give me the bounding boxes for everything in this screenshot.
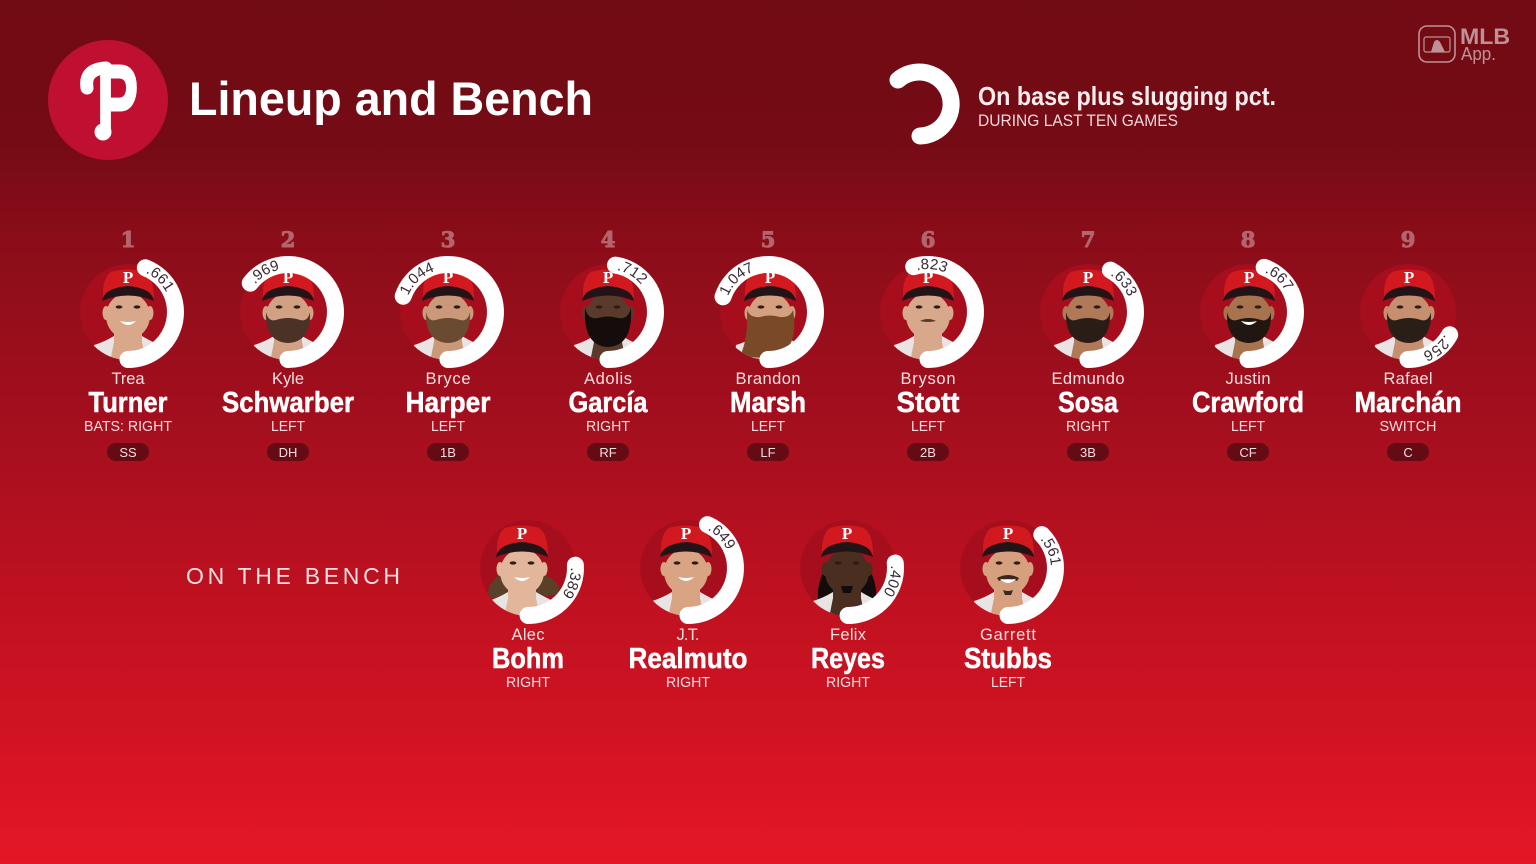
OPS ring 1.044: 1.044 — [400, 262, 434, 295]
player 6: Bryson Stott — [880, 227, 984, 461]
first name: Alec — [512, 626, 544, 644]
headshot: P — [1244, 268, 1254, 287]
bench player: Felix Reyes — [800, 520, 904, 691]
batting side: RIGHT — [506, 674, 550, 691]
player 4: Adolis García — [560, 227, 664, 461]
batting order 6: 6 — [921, 227, 935, 252]
first name: Garrett — [980, 626, 1036, 644]
position pill — [107, 443, 149, 461]
MLB App logo: MLB — [1460, 24, 1510, 49]
batting side: RIGHT — [666, 674, 710, 691]
OPS ring .667: .667 — [1266, 267, 1294, 288]
last name: Harper — [406, 387, 490, 419]
batting order 7: 7 — [1081, 227, 1095, 252]
OPS ring .561: .561 — [1040, 538, 1061, 565]
OPS ring .400 — [840, 554, 904, 624]
headshot — [240, 273, 327, 360]
headshot — [720, 273, 807, 360]
headshot: P — [1083, 268, 1093, 287]
first name: Trea — [112, 370, 145, 388]
position pill: DH — [279, 445, 297, 460]
OPS ring .256 — [1400, 326, 1458, 368]
player 9: Rafael Marchán — [1354, 227, 1462, 461]
position pill: C — [1403, 445, 1413, 460]
headshot: P — [603, 268, 613, 287]
batting side: LEFT — [1231, 418, 1265, 435]
position pill — [1067, 443, 1109, 461]
team logo: Phillies P — [48, 40, 168, 160]
OPS ring .649: .649 — [708, 525, 735, 548]
first name: Brandon — [736, 370, 800, 388]
OPS ring .561 — [1000, 526, 1064, 624]
headshot: P — [765, 268, 775, 287]
headshot — [880, 270, 967, 360]
OPS ring .969: .969 — [253, 260, 278, 284]
OPS ring .823 — [905, 256, 984, 368]
batting side: LEFT — [911, 418, 945, 435]
batting side: LEFT — [431, 418, 465, 435]
position pill: 1B — [440, 445, 456, 460]
legend: text — [978, 81, 1276, 130]
position pill: 2B — [920, 445, 936, 460]
OPS ring .712 — [599, 256, 664, 368]
position pill — [267, 443, 309, 461]
batting side: LEFT — [271, 418, 305, 435]
position pill — [907, 443, 949, 461]
OPS ring .823: .823 — [918, 258, 948, 272]
last name: Marsh — [730, 387, 806, 419]
batting order 8: 8 — [1241, 227, 1255, 252]
position pill — [747, 443, 789, 461]
OPS ring .389 — [520, 556, 584, 624]
batting order 1: 1 — [121, 227, 135, 252]
OPS ring .256: .256 — [1424, 335, 1449, 361]
player 7: Edmundo Sosa — [1040, 227, 1144, 461]
OPS ring .633: .633 — [1111, 271, 1137, 296]
player 5: Brandon Marsh — [714, 227, 824, 461]
last name: Sosa — [1058, 387, 1119, 419]
batting order 5: 5 — [761, 227, 775, 252]
headshot — [1200, 264, 1287, 360]
last name: García — [568, 387, 648, 419]
headshot: P — [443, 268, 453, 287]
first name: Justin — [1226, 370, 1270, 388]
OPS ring .400: .400 — [884, 566, 901, 596]
bench player: J.T. Realmuto — [628, 516, 748, 691]
bench player: Garrett Stubbs — [960, 520, 1064, 691]
last name: Stott — [896, 387, 960, 419]
headshot — [640, 520, 727, 616]
position pill: SS — [119, 445, 137, 460]
title: Lineup and Bench — [189, 72, 593, 125]
headshot: P — [517, 524, 527, 543]
headshot: P — [842, 524, 852, 543]
last name: Reyes — [811, 643, 885, 675]
first name: Felix — [830, 626, 867, 644]
first name: Adolis — [584, 370, 632, 388]
first name: Kyle — [272, 370, 304, 388]
position pill: LF — [760, 445, 776, 460]
OPS ring 1.047 — [714, 256, 824, 368]
player 2: Kyle Schwarber — [222, 227, 354, 461]
player 8: Justin Crawford — [1192, 227, 1304, 461]
last name: Turner — [88, 387, 168, 419]
position pill: RF — [599, 445, 617, 460]
headshot — [560, 264, 647, 360]
OPS ring .969 — [242, 256, 344, 368]
batting order 3: 3 — [441, 227, 455, 252]
OPS ring .667 — [1240, 258, 1304, 368]
headshot — [1040, 264, 1127, 360]
OPS ring .712: .712 — [618, 262, 647, 284]
headshot — [400, 273, 487, 360]
position pill — [1227, 443, 1269, 461]
headshot — [800, 520, 896, 618]
position pill — [1387, 443, 1429, 461]
bench player: Alec Bohm — [480, 520, 584, 691]
batting side: RIGHT — [586, 418, 630, 435]
OPS ring 1.047: 1.047 — [720, 262, 750, 296]
headshot: P — [923, 268, 933, 287]
first name: Bryce — [426, 370, 470, 388]
headshot — [480, 520, 576, 618]
last name: Realmuto — [628, 643, 748, 675]
OPS ring .661 — [120, 259, 184, 368]
position pill: 3B — [1080, 445, 1096, 460]
OPS ring .661: .661 — [146, 268, 174, 292]
headshot — [1360, 264, 1456, 362]
last name: Marchán — [1354, 387, 1462, 419]
MLB App logo — [1419, 24, 1510, 64]
headshot: P — [123, 268, 133, 287]
last name: Crawford — [1192, 387, 1304, 419]
player 3: Bryce Harper — [394, 227, 504, 461]
OPS ring .633 — [1079, 262, 1144, 368]
OPS ring .389: .389 — [564, 568, 581, 598]
legend: text: DURING LAST TEN GAMES — [978, 111, 1178, 130]
first name: Bryson — [900, 370, 956, 388]
first name: Rafael — [1384, 370, 1432, 388]
headshot — [960, 520, 1047, 616]
position pill: CF — [1239, 445, 1257, 460]
last name: Bohm — [492, 643, 564, 675]
last name: Stubbs — [964, 643, 1052, 675]
headshot: P — [1003, 524, 1013, 543]
headshot: P — [283, 268, 293, 287]
team logo: Phillies P: P — [97, 45, 138, 155]
batting side: LEFT — [751, 418, 785, 435]
OPS ring 1.044 — [394, 256, 504, 368]
OPS ring .649 — [680, 516, 744, 624]
batting order 2: 2 — [281, 227, 295, 252]
first name: Edmundo — [1052, 370, 1124, 388]
legend: text: On base plus slugging pct. — [978, 81, 1276, 111]
legend: sample ring — [898, 72, 951, 136]
headshot — [80, 264, 167, 360]
last name: Schwarber — [222, 387, 354, 419]
batting side: SWITCH — [1380, 418, 1436, 435]
position pill — [427, 443, 469, 461]
headshot: P — [681, 524, 691, 543]
headshot: P — [1404, 268, 1414, 287]
batting order 4: 4 — [601, 227, 615, 252]
player 1: Trea Turner — [80, 227, 184, 461]
first name: J.T. — [676, 626, 700, 644]
batting side: LEFT — [991, 674, 1025, 691]
batting side: RIGHT — [826, 674, 870, 691]
batting side: BATS: RIGHT — [84, 418, 172, 435]
section label: on the bench: ON THE BENCH — [186, 563, 400, 589]
MLB App logo: App. — [1461, 44, 1496, 64]
position pill — [587, 443, 629, 461]
batting side: RIGHT — [1066, 418, 1110, 435]
batting order 9: 9 — [1401, 227, 1415, 252]
